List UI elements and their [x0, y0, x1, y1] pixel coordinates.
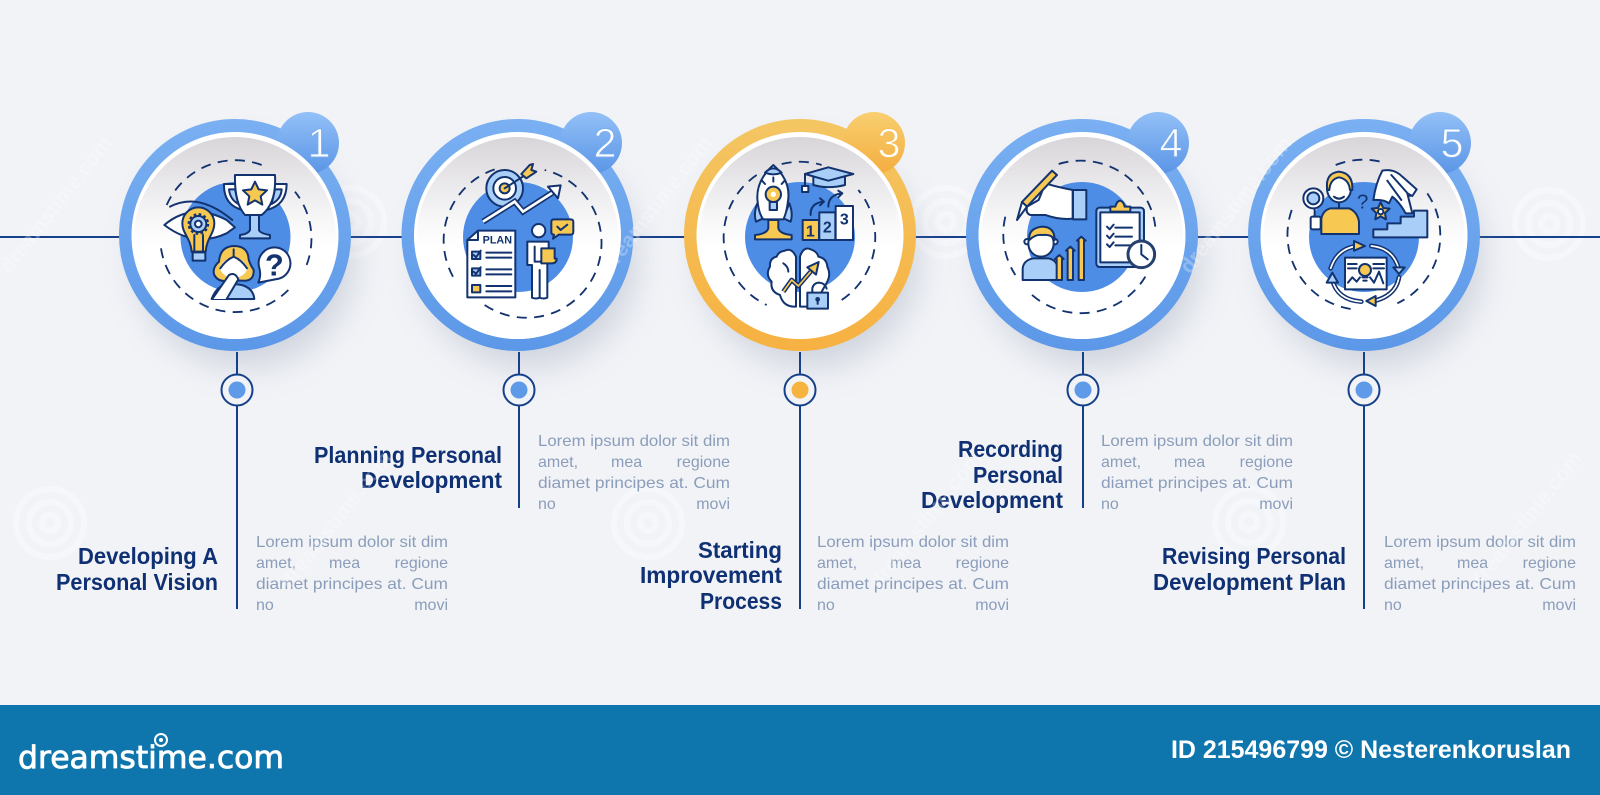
watermark text: dreamstime.com: [1176, 132, 1297, 278]
heading: Process: [700, 588, 782, 614]
body text: mea: [890, 555, 921, 572]
icon: vision, trophy, thinking girl: ?: [265, 248, 284, 282]
body text: regione: [1523, 555, 1576, 572]
body text: amet,: [1101, 454, 1141, 471]
body text: diamet principes at. Cum: [1384, 576, 1576, 593]
body text: no: [1384, 597, 1402, 614]
footer credit: ID 215496799 © Nesterenkoruslan: [1171, 736, 1571, 764]
body text: [1101, 433, 1293, 513]
connector and dot: [784, 352, 816, 609]
heading: [314, 442, 502, 493]
body text: movi: [975, 597, 1009, 614]
body text: movi: [1259, 496, 1293, 513]
body text: Lorem ipsum dolor sit dim: [538, 433, 730, 450]
watermark text: dreamstime.com: [866, 447, 987, 593]
step 1 circle: [119, 112, 353, 366]
body text: regione: [1240, 454, 1293, 471]
heading: [56, 543, 218, 595]
footer bar: [0, 705, 1600, 795]
heading: Revising Personal: [1162, 543, 1346, 569]
body text: amet,: [256, 555, 296, 572]
watermark text: dreamstime.com: [1466, 447, 1587, 593]
icon: vision, trophy, thinking girl: [161, 160, 311, 312]
watermark text: dreamstime.com: [276, 447, 397, 593]
step 3 panel: [640, 112, 1009, 614]
step 3 circle: 3: [878, 120, 900, 166]
body text: diamet principes at. Cum: [817, 576, 1009, 593]
heading: Developing A: [78, 543, 218, 569]
heading: Development: [921, 487, 1063, 513]
body text: no: [256, 597, 274, 614]
body text: movi: [696, 496, 730, 513]
body text: [256, 534, 448, 614]
heading: Planning Personal: [314, 442, 502, 468]
heading: [640, 537, 782, 614]
body text: amet,: [817, 555, 857, 572]
heading: [921, 436, 1063, 513]
watermark pattern: [16, 188, 1583, 557]
icon: rocket, graduation cap, podium, brain: 3: [840, 212, 849, 229]
step 5 circle: 5: [1441, 120, 1463, 166]
step 5 circle: [1248, 112, 1482, 366]
body text: Lorem ipsum dolor sit dim: [1101, 433, 1293, 450]
body text: diamet principes at. Cum: [1101, 475, 1293, 492]
heading: Personal Vision: [56, 569, 218, 595]
connector and dot: [222, 352, 252, 609]
horizontal timeline line: [0, 236, 1600, 238]
body text: regione: [395, 555, 448, 572]
icon: target, trend arrow, plan checklist, person: [444, 164, 602, 318]
icon: writing hand, boy with growth bars, clipboard: [1003, 161, 1155, 313]
body text: diamet principes at. Cum: [538, 475, 730, 492]
body text: no: [538, 496, 556, 513]
body text: mea: [1457, 555, 1488, 572]
step 4 circle: 4: [1160, 120, 1182, 166]
step 2 circle: 2: [594, 120, 616, 166]
heading: Personal: [973, 462, 1063, 488]
heading: Development: [361, 467, 502, 493]
body text: no: [817, 597, 835, 614]
body text: diamet principes at. Cum: [256, 576, 448, 593]
body text: movi: [414, 597, 448, 614]
icon: rocket, graduation cap, podium, brain: [724, 162, 875, 309]
heading: Improvement: [640, 562, 782, 588]
icon: rocket, graduation cap, podium, brain: 1: [806, 224, 815, 241]
body text: Lorem ipsum dolor sit dim: [256, 534, 448, 551]
step 1 panel: [56, 112, 448, 614]
body text: [1384, 534, 1576, 614]
body text: mea: [329, 555, 360, 572]
step 2 panel: [314, 112, 730, 513]
connector and dot: [1348, 352, 1380, 609]
icon: target, trend arrow, plan checklist, person: PLAN: [483, 235, 512, 247]
connector and dot: [1068, 352, 1098, 508]
body text: mea: [1174, 454, 1205, 471]
footer logo: dreamstime.com: [18, 740, 284, 776]
body text: mea: [611, 454, 642, 471]
step 1 circle: 1: [308, 120, 330, 166]
step 5 panel: [1153, 112, 1576, 614]
body text: Lorem ipsum dolor sit dim: [1384, 534, 1576, 551]
icon: man with magnifier, hand with star, stairs, improvement cycle: ?: [1357, 191, 1368, 214]
icon: rocket, graduation cap, podium, brain: 2: [823, 220, 832, 237]
heading: Development Plan: [1153, 569, 1346, 595]
body text: no: [1101, 496, 1119, 513]
watermark text: dreamstime.com: [596, 132, 717, 278]
body text: amet,: [1384, 555, 1424, 572]
body text: [817, 534, 1009, 614]
heading: [1153, 543, 1346, 595]
body text: [538, 433, 730, 513]
connector and dot: [504, 352, 534, 508]
body text: regione: [956, 555, 1009, 572]
watermark text: [0, 132, 1587, 593]
body text: Lorem ipsum dolor sit dim: [817, 534, 1009, 551]
step 4 circle: [966, 112, 1200, 366]
step 3 circle: [684, 112, 918, 366]
heading: Starting: [698, 537, 782, 563]
icon: man with magnifier, hand with star, stairs, improvement cycle: [1287, 160, 1440, 309]
step 4 panel: [921, 112, 1293, 513]
body text: movi: [1542, 597, 1576, 614]
body text: regione: [677, 454, 730, 471]
heading: Recording: [958, 436, 1063, 462]
step 2 circle: [402, 112, 636, 366]
body text: amet,: [538, 454, 578, 471]
